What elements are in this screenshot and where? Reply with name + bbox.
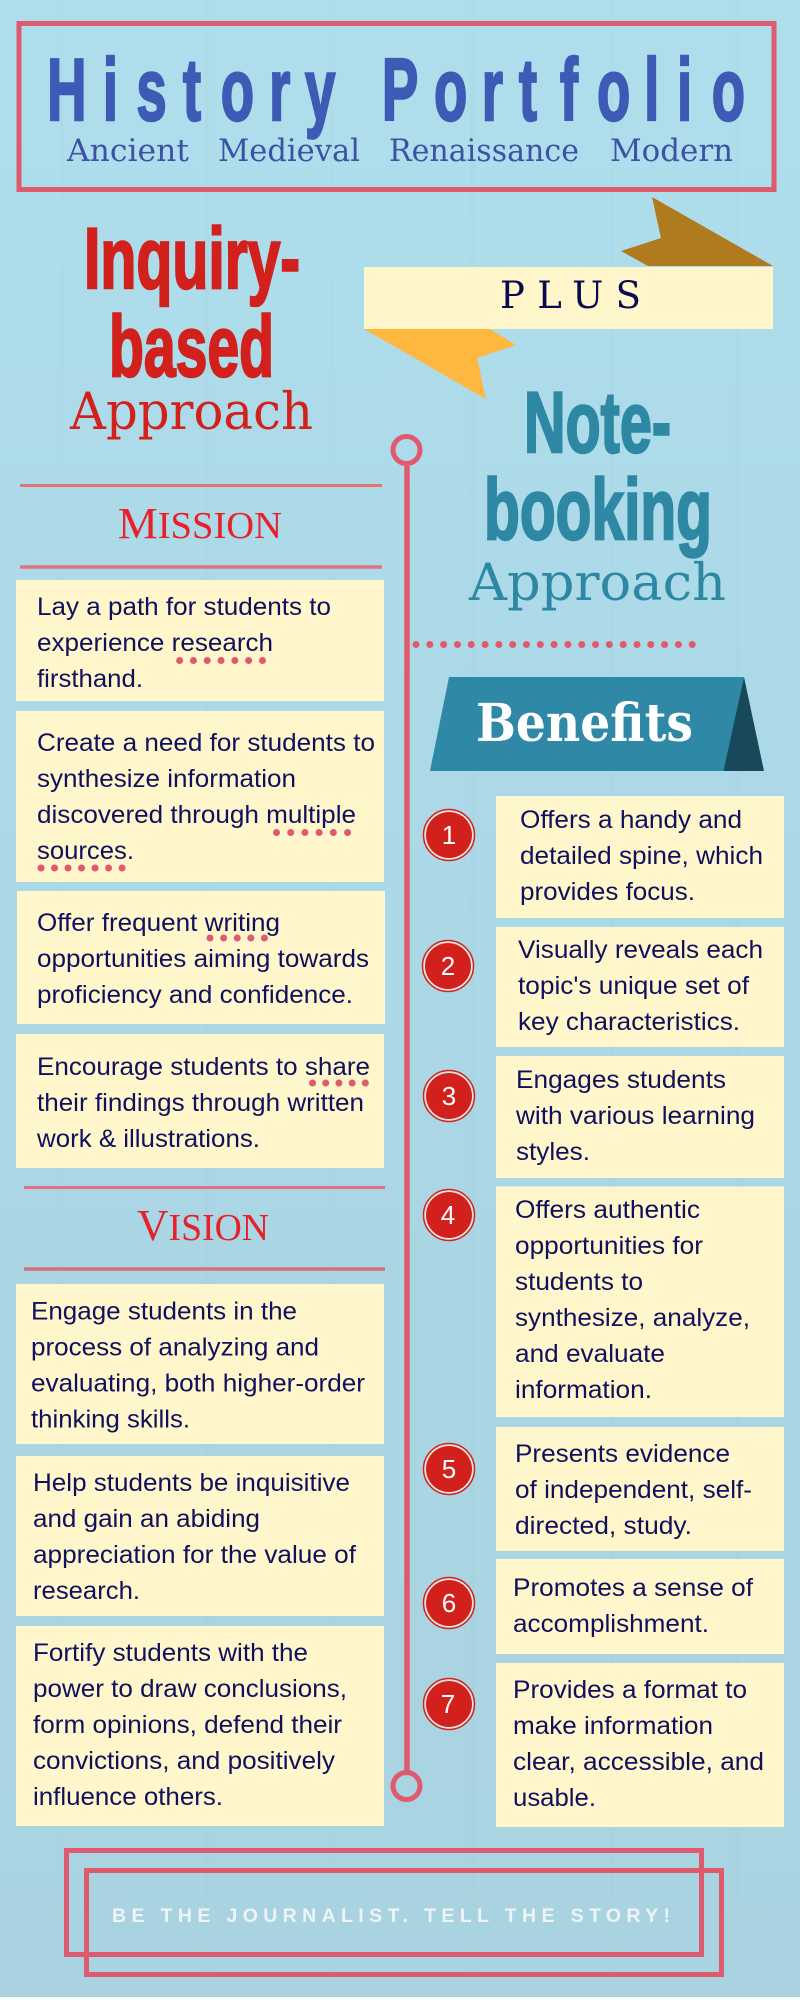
heading: Vision: VISION: [137, 1201, 269, 1250]
banner: Benefits: Benefits: [476, 693, 693, 754]
benefit 6: Promotes a sense of: [513, 1574, 753, 1602]
benefit 4: students to: [515, 1268, 643, 1296]
mission card 3: Offer frequent writing: [37, 909, 280, 937]
benefit 1: detailed spine, which: [520, 842, 763, 870]
vision card 3: convictions, and positively: [33, 1747, 336, 1775]
badge 4: 4: [441, 1200, 455, 1230]
vision card 1: thinking skills.: [31, 1406, 190, 1434]
benefit 4: synthesize, analyze,: [515, 1304, 750, 1332]
heading: Mission: MISSION: [118, 499, 282, 548]
heading: Note-booking Approach: Approach: [468, 554, 726, 613]
heading: Note-booking Approach: Note-: [524, 375, 671, 471]
benefit 6: accomplishment.: [513, 1610, 709, 1638]
mission card 3: [17, 891, 385, 1024]
vision card 3: Fortify students with the: [33, 1639, 308, 1667]
title panel: [19, 24, 774, 190]
benefit 4: information.: [515, 1376, 652, 1404]
ribbon: PLUS: PLUS: [500, 274, 641, 317]
vision card 3: influence others.: [33, 1783, 223, 1811]
badge 5: 5: [442, 1454, 456, 1484]
footer callout: BE THE JOURNALIST. TELL THE STORY!: [112, 1905, 670, 1927]
badge 7: 7: [441, 1689, 455, 1719]
benefit 7: Provides a format to: [513, 1676, 747, 1704]
benefit 2: [422, 927, 784, 1047]
benefit 7: usable.: [513, 1784, 596, 1812]
vision card 2: [16, 1456, 384, 1616]
mission card 3: proficiency and confidence.: [37, 981, 353, 1009]
subtitle: eras: Ancient: [66, 133, 190, 169]
badge 6: 6: [442, 1588, 456, 1618]
badge 3: 3: [442, 1081, 456, 1111]
benefit 2: topic's unique set of: [518, 972, 749, 1000]
vision card 3: power to draw conclusions,: [33, 1675, 347, 1703]
benefit 4: Offers authentic: [515, 1196, 700, 1224]
benefit 2: Visually reveals each: [518, 936, 763, 964]
mission card 2: discovered through multiple: [37, 801, 356, 829]
benefit 6: [424, 1559, 784, 1654]
mission card 1: Lay a path for students to: [37, 593, 331, 621]
mission card 3: opportunities aiming towards: [37, 945, 369, 973]
heading: Inquiry-based Approach: based: [109, 299, 274, 395]
benefit 7: make information: [513, 1712, 713, 1740]
benefit 3: with various learning: [515, 1102, 755, 1130]
mission card 2: synthesize information: [37, 765, 296, 793]
banner: Benefits: [430, 677, 764, 771]
vision card 2: Help students be inquisitive: [33, 1469, 350, 1497]
vision card 2: and gain an abiding: [33, 1505, 260, 1533]
badge 2: [422, 940, 474, 992]
benefit 5: [424, 1427, 784, 1551]
vision card 2: research.: [33, 1577, 140, 1605]
panel: vision: [16, 1188, 385, 1826]
mission card 1: [16, 580, 384, 701]
badge 2: 2: [441, 951, 455, 981]
mission card 4: work & illustrations.: [36, 1125, 260, 1153]
mission card 1: firsthand.: [37, 665, 143, 693]
benefit 4: [424, 1186, 784, 1417]
benefit 4: and evaluate: [515, 1340, 665, 1368]
benefit 1: Offers a handy and: [520, 806, 742, 834]
benefit 5: Presents evidence: [515, 1440, 730, 1468]
subtitle: eras: [66, 133, 733, 169]
benefit 1: provides focus.: [520, 878, 695, 906]
mission card 4: Encourage students to share: [37, 1053, 370, 1081]
heading: Inquiry-based Approach: Approach: [69, 383, 313, 442]
title: History Portfolio: History Portfolio: [47, 41, 745, 139]
mission card 4: their findings through written: [37, 1089, 364, 1117]
badge 1: 1: [442, 820, 456, 850]
badge 5: [424, 1444, 474, 1494]
subtitle: eras: Renaissance: [389, 133, 579, 169]
badge 3: [424, 1070, 474, 1122]
mission card 2: [16, 711, 384, 882]
mission card 2: Create a need for students to: [37, 729, 375, 757]
mission card 4: [16, 1034, 384, 1168]
dotted divider: [416, 641, 693, 648]
vision card 1: evaluating, both higher-order: [31, 1370, 365, 1398]
vision card 1: [16, 1284, 384, 1444]
badge 4: [424, 1190, 474, 1240]
vision card 1: process of analyzing and: [31, 1334, 319, 1362]
benefit 3: Engages students: [516, 1066, 726, 1094]
subtitle: eras: Medieval: [218, 133, 360, 169]
benefit 5: directed, study.: [515, 1512, 692, 1540]
mission card 2: sources.: [37, 837, 134, 865]
benefit 3: [424, 1056, 784, 1178]
heading: Inquiry-based Approach: [69, 211, 313, 442]
badge 7: [424, 1678, 474, 1730]
benefit 7: clear, accessible, and: [513, 1748, 764, 1776]
ribbon: PLUS: [364, 197, 773, 399]
vision card 3: [16, 1626, 384, 1826]
benefit 2: key characteristics.: [518, 1008, 740, 1036]
mission card 1: experience research: [37, 629, 273, 657]
vision card 1: Engage students in the: [31, 1298, 297, 1326]
benefit 7: [424, 1663, 784, 1827]
vision card 2: appreciation for the value of: [33, 1541, 356, 1569]
badge 6: [424, 1578, 474, 1628]
benefit 1: [424, 796, 784, 918]
footer callout: [66, 1850, 722, 1974]
benefit 3: styles.: [516, 1138, 590, 1166]
subtitle: eras: Modern: [610, 133, 733, 169]
heading: Note-booking Approach: [468, 375, 726, 613]
benefit 5: of independent, self-: [515, 1476, 752, 1504]
heading: Inquiry-based Approach: Inquiry-: [84, 211, 300, 307]
central timeline spine: [393, 436, 420, 1800]
benefit 4: opportunities for: [515, 1232, 703, 1260]
vision card 3: form opinions, defend their: [33, 1711, 342, 1739]
badge 1: [424, 810, 474, 860]
panel: mission: [16, 486, 385, 1168]
